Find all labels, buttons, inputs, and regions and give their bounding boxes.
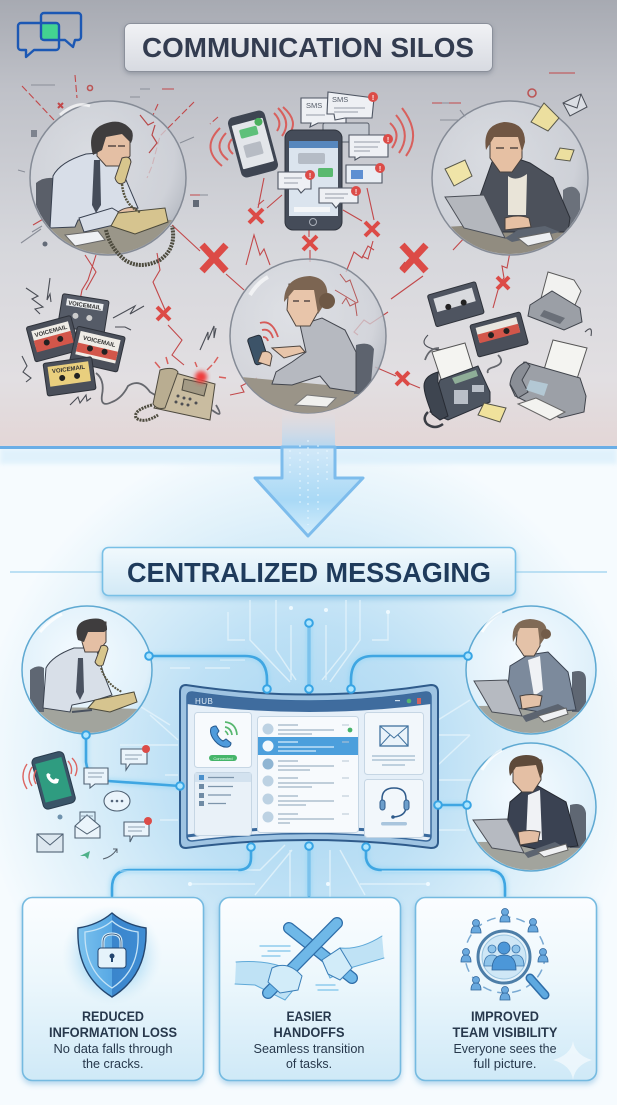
icon: yellow sticky note: [478, 403, 506, 422]
text: card heading and description: TEAM VISIBILITY: [452, 1025, 558, 1040]
panel: centralized messaging background: [0, 447, 617, 1105]
icon cluster: phone and message sources: [23, 745, 152, 859]
text: card heading and description: of tasks.: [286, 1057, 332, 1071]
small grey and red debris marks: [31, 86, 536, 246]
connector lines: [86, 623, 505, 896]
cassette tapes: voicemail: VOICEMAIL: [34, 325, 68, 339]
bubble: man on laptop, connected: [466, 743, 600, 880]
bubble: man on laptop with sticky notes: [430, 94, 590, 260]
icon: shield with padlock: [62, 905, 162, 1005]
circuit traces background: [120, 600, 480, 900]
text: card heading and description: REDUCED: [82, 1009, 144, 1024]
icon: ringing desk phone: [136, 357, 226, 420]
text: card heading and description: Everyone sees the: [454, 1042, 557, 1056]
text: card heading and description: [452, 1009, 558, 1071]
text: card heading and description: full picture.: [474, 1057, 536, 1071]
card: easier handoffs: [220, 898, 400, 1080]
icon: main smartphone with notification bubbles: !: [372, 95, 374, 102]
panel: hub window: [180, 685, 438, 848]
heading: communication silos: [124, 24, 492, 72]
text: card heading and description: EASIER: [286, 1009, 332, 1024]
icon: red signal waves: [210, 107, 413, 166]
scattered red broken-signal lines: [18, 73, 575, 395]
card: sidebar menu: [194, 772, 252, 836]
text: card heading and description: [49, 1009, 177, 1071]
icon: main smartphone with notification bubbles: !: [309, 173, 311, 180]
heading: centralized messaging: CENTRALIZED MESSAGING: [127, 557, 491, 588]
bubble: man on desk phone: [25, 101, 190, 265]
text: card heading and description: INFORMATION LOSS: [49, 1025, 177, 1040]
arrow: transformation pointing down: [255, 440, 363, 536]
panel: hub window: HUB: [195, 697, 213, 706]
cassette tapes: voicemail: [26, 294, 125, 396]
icon: fax machine with handset: [424, 343, 490, 427]
glowing boundary line: [0, 448, 617, 464]
panel: communication silos background: [0, 0, 617, 447]
card: call status: Connected: [213, 756, 233, 761]
connector dots: [82, 619, 472, 851]
icon: main smartphone with notification bubbles: SMS: [332, 95, 348, 104]
icon: main smartphone with notification bubbles: !: [379, 166, 381, 173]
text: card heading and description: the cracks.: [82, 1057, 144, 1071]
tape cords: [96, 348, 501, 414]
card: support headset: [364, 780, 424, 838]
card: email: [364, 712, 424, 774]
logo: overlapping chat bubbles: [18, 13, 81, 57]
bubble: woman on laptop, connected: [466, 606, 600, 740]
icon: fax machine with paper: [510, 340, 587, 420]
cassette tapes: loose: [427, 281, 529, 357]
bubble: woman on mobile phone: [230, 259, 386, 420]
red X marks: [157, 209, 509, 385]
text: card heading and description: IMPROVED: [471, 1009, 539, 1024]
text: card heading and description: No data falls through: [54, 1042, 173, 1056]
arrow band rising from boundary: [282, 412, 335, 448]
icon: main smartphone with notification bubbles: !: [355, 189, 357, 196]
card: reduced information loss: [22, 898, 204, 1080]
cassette tapes: voicemail: VOICEMAIL: [68, 301, 102, 312]
cassette tapes: voicemail: VOICEMAIL: [82, 336, 116, 349]
text: card heading and description: [254, 1009, 365, 1071]
card: improved team visibility: [416, 898, 596, 1080]
card: message list: [258, 716, 358, 832]
text: card heading and description: Seamless transition: [254, 1042, 365, 1056]
icon: main smartphone with notification bubbles: [278, 92, 393, 230]
bubble: man on desk phone, connected: [22, 606, 155, 740]
text: card heading and description: HANDOFFS: [274, 1025, 344, 1040]
icon: relay baton handoff: [235, 923, 384, 1000]
heading: communication silos: COMMUNICATION SILOS: [142, 32, 474, 63]
icon: main smartphone with notification bubbles: !: [387, 137, 389, 144]
icon: magnifier over team network: [461, 908, 548, 1000]
icon: main smartphone with notification bubbles: SMS: [306, 101, 322, 110]
cassette tapes: voicemail: VOICEMAIL: [52, 365, 86, 375]
icon: fax printer top right: [528, 272, 582, 330]
black scribble sparks: [22, 278, 591, 405]
icon: corner sparkle: [553, 1041, 592, 1080]
card: call status: [194, 712, 252, 768]
icon: small phone with green message: [227, 109, 279, 179]
heading: centralized messaging: [10, 548, 607, 596]
